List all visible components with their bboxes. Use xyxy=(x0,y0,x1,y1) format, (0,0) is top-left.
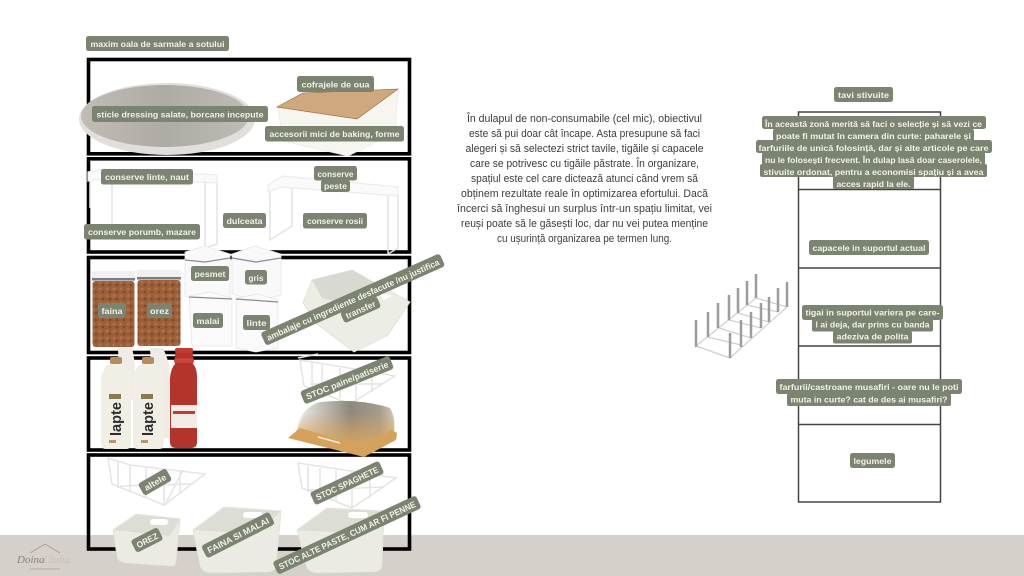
label: conserve porumb: conserve porumb, mazare xyxy=(88,227,196,237)
label: tavi stivuite: tavi stivuite xyxy=(838,90,889,100)
text block: description: alegeri și să selectezi strict tavile, tigăile și capacele xyxy=(466,143,704,155)
text block: description: este să pui doar cât încape. Asta presupune să faci xyxy=(469,128,700,140)
label: zone note xyxy=(756,116,992,189)
label: sticle dressing xyxy=(92,106,268,122)
icon: pan rack xyxy=(696,274,787,358)
item: wire basket right, shelf 5 xyxy=(298,463,396,508)
shelving unit xyxy=(88,60,410,549)
logo: Doina xyxy=(16,554,45,566)
label: tigai xyxy=(802,305,943,344)
label: linte xyxy=(243,315,270,330)
label: accesorii: accesorii mici de baking, forme xyxy=(270,129,400,139)
item: box with bamboo lid xyxy=(277,89,398,156)
label: orez xyxy=(147,303,172,318)
item: small bin xyxy=(113,514,180,566)
item: four clear canisters xyxy=(185,246,281,352)
text block: description: cu ușurință organizarea pe termen lung. xyxy=(497,233,672,245)
label: legumele: legumele xyxy=(854,456,892,466)
label: STOC paine: STOC paine/patiserie xyxy=(305,359,390,402)
item: wire basket left, shelf 5 xyxy=(108,458,205,505)
label: FAINA SI MALAI: FAINA SI MALAI xyxy=(206,516,271,555)
item: white storage bin, shelf 3 xyxy=(303,270,410,352)
item: flour and rice jars xyxy=(92,270,181,347)
label: maxim oala: maxim oala de sarmale a sotului xyxy=(90,39,224,49)
label: altele xyxy=(138,468,172,496)
item: lazy susan tray xyxy=(79,83,255,155)
label: malai xyxy=(193,313,223,328)
label: zone note: nu le folosești frecvent. În dulap lasă doar caserolele, xyxy=(765,154,982,165)
label: orez: orez xyxy=(150,306,170,316)
text block: description: reuși poate să le găsești loc, dar nu vei putea menține xyxy=(461,218,708,230)
label: conserve peste: peste xyxy=(324,181,347,191)
label: OREZ: OREZ xyxy=(135,530,160,550)
item: left shelf riser xyxy=(88,169,217,248)
label: linte: linte xyxy=(246,318,267,328)
text block: description: În dulapul de non-consumabile (cel mic), obiectivul xyxy=(466,112,702,125)
label: conserve linte: conserve linte, naut xyxy=(105,172,189,182)
label: tavi stivuite xyxy=(834,87,893,102)
label: gris xyxy=(245,270,267,284)
label: faina xyxy=(98,303,126,318)
label: cofrajele de oua: cofrajele de oua xyxy=(302,80,370,90)
label: malai: malai xyxy=(196,316,220,326)
label: STOC SPAGHETE: STOC SPAGHETE xyxy=(314,464,380,502)
label: gris: gris xyxy=(248,273,264,283)
label: tigai: adeziva de polita xyxy=(836,332,909,342)
label: pesmet: pesmet xyxy=(194,269,226,279)
label: altele: altele xyxy=(142,472,168,493)
label: dulceata: dulceata xyxy=(226,216,263,226)
logo: Cioba xyxy=(43,554,70,566)
label: conserve rosii xyxy=(303,213,367,228)
label: maxim oala xyxy=(86,36,229,51)
label: ambalaje transfer: ambalaje cu ingrediente desfacute /nu justifica xyxy=(265,257,441,343)
label: zone note: farfuriile de unică folosință, dar și alte articole pe care xyxy=(758,143,989,153)
label: accesorii xyxy=(265,126,404,142)
label: faina: faina xyxy=(102,306,123,316)
label: cofrajele de oua xyxy=(297,76,374,92)
label: sticle dressing: sticle dressing salate, borcane incepute xyxy=(96,110,264,120)
label: dulceata xyxy=(223,213,266,228)
item: milk and sauce bottles: lapte xyxy=(140,402,157,436)
label: conserve peste xyxy=(314,166,357,192)
item: milk and sauce bottles xyxy=(101,348,197,449)
right column dividers xyxy=(798,112,941,502)
label: zone note: stivuite ordonat, pentru a economisi spațiu și a avea xyxy=(764,167,984,177)
text block: description: care se potrivesc cu tigăile păstrate. În organizare, xyxy=(470,157,699,170)
label: OREZ xyxy=(130,527,164,553)
label: capacele: capacele in suportul actual xyxy=(812,243,926,253)
label: conserve porumb xyxy=(84,224,200,240)
label: tigai: l ai deja, dar prins cu banda xyxy=(816,320,930,330)
item: medium bin xyxy=(193,507,281,573)
text block: description xyxy=(456,112,712,245)
text block: description: spațiul este cel care dictează atunci când vrem să xyxy=(471,173,699,185)
footer band xyxy=(0,535,1024,576)
item: right shelf riser xyxy=(268,176,398,254)
label: conserve peste: conserve xyxy=(318,169,354,179)
logo xyxy=(16,544,70,569)
item: large bin xyxy=(297,508,384,573)
label: zone note: În această zonă merită să faci o selecție și să vezi ce xyxy=(764,118,982,129)
label: ambalaje transfer: transfer xyxy=(344,298,378,321)
label: farfurii xyxy=(776,379,962,406)
label: pesmet xyxy=(191,266,229,281)
label: conserve rosii: conserve rosii xyxy=(307,216,363,226)
item: wire basket, shelf 4 xyxy=(298,354,395,404)
text block: description: obținem rezultate reale în optimizarea efortului. Dacă xyxy=(461,188,709,200)
label: STOC ALTE PASTE: STOC ALTE PASTE, CUM AR FI PENNE xyxy=(277,499,417,572)
item: bread box xyxy=(288,401,397,457)
item: milk and sauce bottles: lapte xyxy=(108,402,125,436)
label: farfurii: muta in curte? cat de des ai musafiri? xyxy=(790,394,948,404)
label: zone note: acces rapid la ele. xyxy=(836,179,910,189)
label: conserve linte xyxy=(101,169,193,184)
label: farfurii: farfurii/castroane musafiri - oare nu le poti xyxy=(780,382,958,392)
label: capacele xyxy=(809,240,929,255)
label: zone note: poate fi mutat în camera din curte: paharele și xyxy=(776,131,971,141)
label: legumele xyxy=(850,453,895,468)
label: tigai: tigai in suportul variera pe care- xyxy=(806,308,940,318)
text block: description: încerci să înghesui un surplus într-un spațiu limitat, vei xyxy=(456,203,712,215)
